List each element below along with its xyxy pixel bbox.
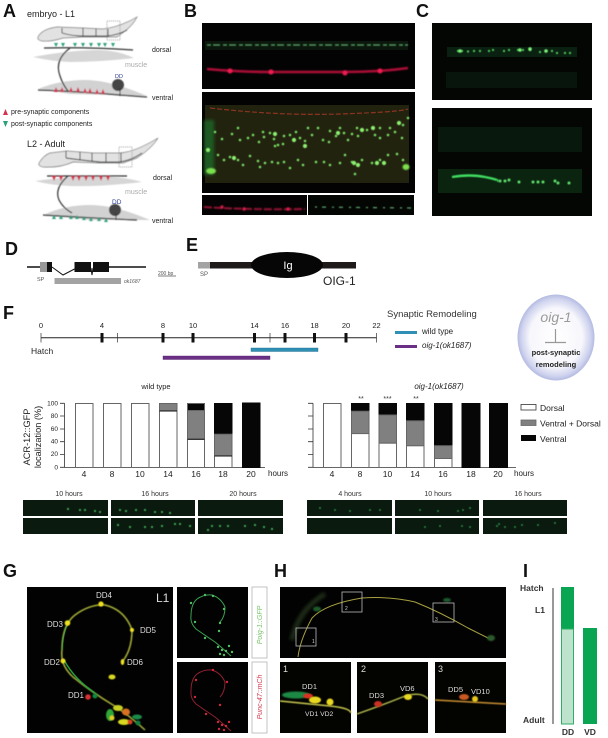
neuron labels adult: DD — [112, 199, 122, 206]
thumbnails oig-1: 4 hours — [338, 491, 362, 498]
thumbnails oig-1: 16 hours — [514, 491, 542, 498]
neuron labels embryo — [115, 47, 173, 102]
merged micrograph L1: DD5 — [140, 626, 157, 635]
timeline: 16 — [281, 321, 289, 330]
legend localization: Dorsal — [540, 403, 565, 413]
bar chart oig-1: 10 — [383, 469, 392, 479]
neuron labels embryo: DD — [115, 74, 123, 80]
muscle and neuron adult — [35, 176, 150, 222]
neuron labels adult: dorsal — [153, 175, 173, 182]
deletion allele ok1687: SP — [37, 277, 45, 283]
heading I: I — [523, 561, 528, 581]
micrograph Poig-1 GFP — [177, 587, 248, 658]
panel A: synapse schematic — [3, 1, 173, 225]
heading C: C — [416, 1, 429, 21]
bar chart oig-1: 18 — [466, 469, 476, 479]
legend synaptic remodeling: Synaptic Remodeling — [387, 309, 477, 320]
merged micrograph L1: DD3 — [47, 620, 64, 629]
bar chart wild type: 16 — [191, 469, 201, 479]
panel G: L1 micrographs — [3, 561, 267, 733]
VD expression bar — [583, 628, 597, 737]
legend synaptic remodeling: wild type — [421, 327, 454, 336]
thumbnails wild type — [23, 491, 283, 534]
label L2 - Adult: L2 - Adult — [27, 139, 66, 149]
merged micrograph L1: L1 — [156, 591, 170, 605]
panel F: timeline and charts — [3, 294, 601, 534]
gene diagram — [27, 262, 146, 275]
worm embryo stage — [38, 17, 137, 41]
inset 2: VD6 — [400, 684, 415, 693]
micrograph Punc-47 mCh — [177, 662, 248, 733]
heading B: B — [184, 1, 197, 21]
inset 3: VD10 — [471, 687, 490, 696]
inset 1: VD1 VD2 — [305, 711, 334, 718]
significance stars: ** — [358, 396, 364, 403]
micrograph bottom red — [202, 195, 307, 215]
micrograph bottom green — [308, 195, 414, 215]
OIG-1 protein diagram: SP — [200, 272, 208, 278]
bar chart oig-1: 4 — [330, 469, 335, 479]
panel H: micrographs — [274, 561, 506, 733]
timeline: 22 — [372, 321, 381, 330]
thumbnails oig-1: 10 hours — [424, 491, 452, 498]
heading A: A — [3, 1, 16, 21]
remodeling bars — [163, 348, 318, 360]
neuron labels adult — [112, 175, 173, 225]
legend synaptic components — [3, 109, 93, 128]
timeline: 0 — [39, 321, 43, 330]
bar chart wild type: 18 — [218, 469, 228, 479]
bar chart oig-1: 14 — [410, 469, 420, 479]
timeline: Hatch — [31, 346, 53, 356]
panel I: expression timeline — [520, 561, 597, 737]
significance stars — [358, 396, 419, 403]
timeline axis labels — [520, 583, 553, 725]
bar chart wild type: 40 — [51, 438, 58, 446]
timeline: 8 — [161, 321, 165, 330]
bar chart wild type: 80 — [51, 413, 58, 420]
y axis label: ACR-12::GFP — [22, 409, 32, 465]
model circle: remodeling — [536, 360, 577, 369]
overview micrograph: 2 — [345, 606, 348, 612]
inset 2: DD3 — [369, 691, 384, 700]
y axis label: localization (%) — [33, 406, 43, 468]
label embryo - L1: embryo - L1 — [27, 9, 75, 19]
side label Punc-47 — [252, 662, 267, 733]
timeline: 4 — [100, 321, 104, 330]
bar chart oig-1: hours — [514, 469, 534, 478]
legend localization — [521, 403, 601, 444]
bar chart wild type: 14 — [163, 469, 173, 479]
timeline: 18 — [310, 321, 319, 330]
bar chart wild type: 100 — [47, 400, 58, 408]
OIG-1 protein diagram — [198, 252, 356, 288]
heading F: F — [3, 303, 14, 323]
model circle: oig-1 — [540, 309, 572, 325]
model circle: post-synaptic — [532, 348, 580, 357]
side label Poig-1: Poig-1::GFP — [257, 605, 264, 644]
overview micrograph: 3 — [435, 617, 438, 623]
bar chart oig-1: 16 — [438, 469, 448, 479]
thumbnails oig-1 — [307, 491, 567, 534]
OIG-1 protein diagram: Ig — [283, 260, 293, 272]
bar chart wild type: 60 — [51, 426, 58, 433]
timeline axis labels: L1 — [535, 605, 545, 615]
inset 2: 2 — [361, 664, 366, 674]
panel E: protein structure — [186, 235, 356, 288]
significance stars: ** — [413, 396, 419, 403]
timeline: 14 — [250, 321, 259, 330]
merged micrograph L1: DD6 — [127, 658, 144, 667]
bar chart wild type: 8 — [110, 469, 115, 479]
legend synaptic remodeling: oig-1(ok1687) — [422, 341, 472, 350]
timeline: 20 — [342, 321, 350, 330]
inset 1: DD1 — [302, 682, 317, 691]
worm adult stage — [39, 138, 158, 167]
panel C: micrographs — [416, 1, 592, 216]
VD expression bar: VD — [584, 727, 596, 737]
merged micrograph L1: DD4 — [96, 591, 113, 600]
bar chart oig-1: 20 — [493, 469, 503, 479]
chart title oig-1: oig-1(ok1687) — [414, 382, 464, 391]
panel B: micrographs — [184, 1, 415, 215]
inset 2 — [357, 662, 428, 733]
heading G: G — [3, 561, 17, 581]
neuron labels adult: ventral — [152, 218, 173, 225]
merged micrograph L1: DD2 — [44, 658, 61, 667]
legend synaptic remodeling — [387, 309, 477, 350]
inset 1 — [280, 662, 351, 733]
timeline axis labels: Hatch — [520, 583, 544, 593]
inset 3: DD5 — [448, 685, 463, 694]
micrograph C bottom — [432, 108, 592, 216]
significance stars: *** — [383, 396, 392, 403]
bar chart wild type: 20 — [51, 451, 58, 458]
bar chart oig-1: 8 — [358, 469, 363, 479]
bar chart wild type: 4 — [82, 469, 87, 479]
panel D: gene structure — [5, 239, 176, 285]
deletion allele ok1687 — [37, 277, 141, 285]
merged micrograph L1: DD1 — [68, 691, 85, 700]
muscle and neuron embryo — [33, 43, 147, 97]
scale bar 200 bp: 200 bp — [158, 271, 174, 277]
heading H: H — [274, 561, 287, 581]
heading D: D — [5, 239, 18, 259]
inset 1: 1 — [283, 664, 288, 674]
overview micrograph — [280, 587, 506, 658]
OIG-1 protein diagram: OIG-1 — [323, 274, 356, 288]
micrograph C top — [432, 23, 592, 100]
y axis label — [22, 406, 43, 468]
inset 3 — [435, 662, 506, 733]
timeline: 10 — [189, 321, 197, 330]
bar chart wild type: 20 — [246, 469, 256, 479]
legend synaptic components: pre-synaptic components — [11, 109, 90, 116]
micrograph middle whole worm — [202, 92, 415, 193]
neuron labels adult: muscle — [125, 189, 147, 196]
bar chart wild type: 0 — [54, 464, 58, 472]
thumbnails wild type: 20 hours — [229, 491, 257, 498]
inset 3: 3 — [438, 664, 443, 674]
legend synaptic components: post-synaptic components — [11, 121, 93, 128]
side label Poig-1 — [252, 587, 267, 658]
chart title wild type: wild type — [140, 382, 171, 391]
DD expression bar: DD — [562, 727, 574, 737]
thumbnails wild type: 16 hours — [141, 491, 169, 498]
micrograph top green and red — [202, 23, 415, 89]
timeline — [31, 321, 381, 356]
legend localization: Ventral + Dorsal — [540, 418, 601, 428]
neuron labels embryo: ventral — [152, 95, 173, 102]
neuron labels embryo: dorsal — [152, 47, 172, 54]
DD expression bar — [561, 587, 574, 737]
thumbnails wild type: 10 hours — [55, 491, 83, 498]
timeline axis labels: Adult — [523, 715, 545, 725]
merged micrograph L1 — [27, 587, 173, 733]
heading E: E — [186, 235, 198, 255]
bar chart wild type: 10 — [135, 469, 145, 479]
legend localization: Ventral — [540, 434, 567, 444]
deletion allele ok1687: ok1687 — [124, 279, 141, 285]
side label Punc-47: Punc-47::mCh — [257, 675, 264, 719]
bar chart wild type: hours — [268, 469, 288, 478]
model circle — [518, 294, 594, 380]
overview micrograph: 1 — [312, 639, 315, 645]
bar chart wild type — [47, 400, 288, 479]
neuron labels embryo: muscle — [125, 62, 147, 69]
bar chart oig-1 — [308, 403, 534, 479]
